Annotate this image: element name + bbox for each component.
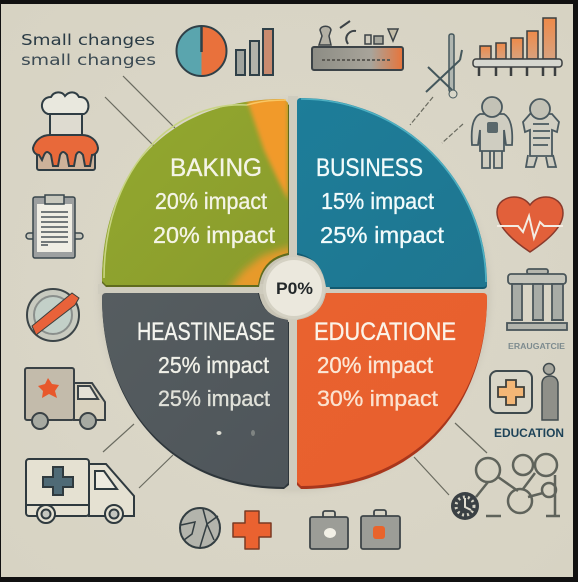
icon: ambulance xyxy=(26,459,134,523)
panel: baking: BAKING xyxy=(170,154,262,182)
icon: chef hat cake xyxy=(33,92,98,170)
gap between quadrants xyxy=(98,96,490,490)
arrows xyxy=(103,76,487,495)
icon: heart with pulse xyxy=(497,197,563,252)
icon: globe xyxy=(180,508,220,548)
education label: EDUCATION xyxy=(494,428,564,440)
panel: business: BUSINESS xyxy=(316,154,423,182)
panel: baking: 20% impact xyxy=(155,188,267,214)
panel: health: 25% impact xyxy=(158,386,271,411)
panel: baking xyxy=(102,96,292,292)
icon: delivery truck xyxy=(25,368,105,429)
icon: shelf of objects xyxy=(312,21,403,70)
panel: business: 25% impact xyxy=(320,222,444,248)
icon: temple columns xyxy=(507,269,567,330)
title xyxy=(21,31,156,69)
panel: education: 20% impact xyxy=(317,352,433,378)
panel: health: HEASTINEASE xyxy=(137,318,275,346)
small grey caption: ERAUGATCIE xyxy=(508,342,566,351)
panel: education xyxy=(297,293,487,489)
icon: prohibition sign xyxy=(27,289,79,341)
icon: clock xyxy=(451,492,479,520)
icon: node network xyxy=(476,454,560,516)
panel: education: 30% impact xyxy=(317,386,439,411)
icon: crossed tool xyxy=(426,34,462,98)
panel: business: 15% impact xyxy=(321,188,434,214)
center badge xyxy=(263,257,325,319)
icon: two people xyxy=(472,97,559,168)
panel: health xyxy=(102,293,289,489)
icon: clipboard xyxy=(26,195,83,258)
icon: rising bars on shelf xyxy=(473,18,562,76)
panel: business xyxy=(297,98,487,289)
panel: health: 25% impact xyxy=(158,352,269,378)
panel: education: EDUCATIONE xyxy=(314,318,456,346)
title: Small changes xyxy=(21,31,155,49)
center badge: P0% xyxy=(276,279,313,298)
title: small changes xyxy=(21,51,156,69)
icon: briefcase white xyxy=(310,511,348,549)
icon: briefcase orange xyxy=(361,510,400,549)
orange wedge xyxy=(226,99,288,285)
pie shadow xyxy=(101,102,489,490)
icon: pie chart and bars xyxy=(176,26,273,76)
icon: orange cross xyxy=(233,511,271,549)
icon: cross badge xyxy=(490,371,532,413)
icon: standing person xyxy=(542,364,558,420)
panel: baking: 20% impact xyxy=(153,222,275,248)
